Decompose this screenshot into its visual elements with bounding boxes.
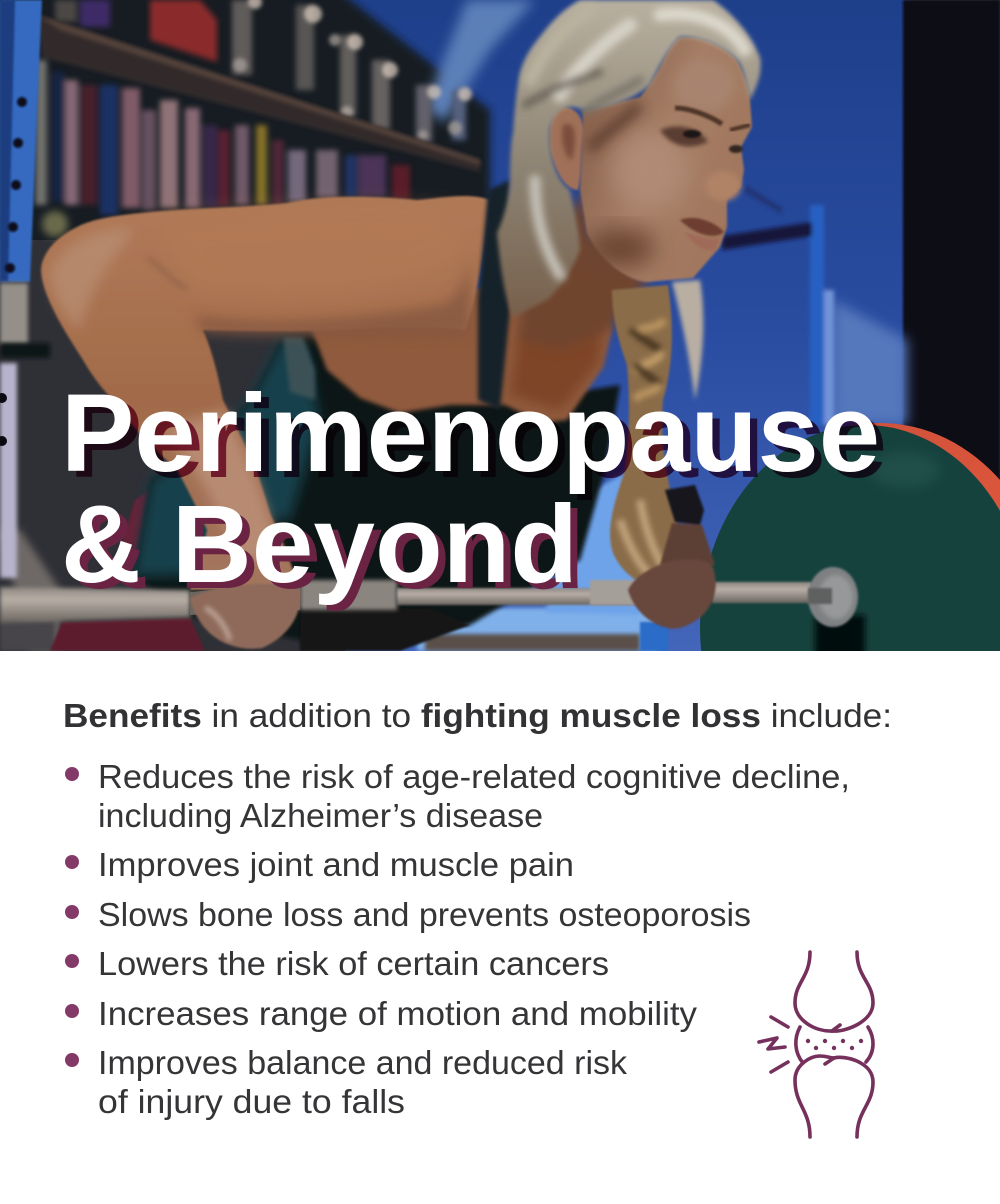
intro heading: Benefits in addition to fighting muscle loss include: (63, 698, 892, 735)
bullet: balance: Improves balance and reduced risk (98, 1045, 627, 1082)
bullet: balance: of injury due to falls (98, 1084, 405, 1121)
trophies and ribbons above the shelf (55, 0, 466, 143)
bullet: balance (65, 1045, 627, 1121)
bullet: cognitive decline: including Alzheimer’s disease (98, 798, 543, 835)
bullet: cognitive decline: Reduces the risk of age-related cognitive decline, (98, 759, 850, 796)
bullet: mobility: Increases range of motion and mobility (98, 996, 697, 1033)
bullet: bone loss: Slows bone loss and prevents osteoporosis (98, 897, 751, 934)
woman's watch and wrist (660, 485, 715, 565)
woman's chest and neck (310, 280, 612, 423)
title (61, 372, 880, 606)
title shadow, second line: & Beyond (69, 489, 585, 612)
woman's face (580, 37, 752, 282)
floor and light patches (417, 470, 668, 651)
title: Perimenopause (61, 372, 880, 495)
icon: painful knee joint (759, 952, 873, 1137)
rack on the wall at right (722, 185, 834, 425)
woman's hair (497, 0, 761, 400)
weight plate (700, 423, 1000, 651)
woman's ear (549, 107, 583, 190)
shelf board (37, 15, 480, 172)
bullet: cognitive decline (65, 759, 850, 835)
title: & Beyond (61, 483, 578, 606)
woman's shorts (50, 490, 205, 651)
woman's neck (520, 190, 650, 350)
benefits list (65, 759, 850, 1121)
woman's arm (41, 196, 490, 590)
woman's black tank top (133, 335, 620, 651)
tank top strap (478, 180, 510, 410)
hero photo: woman lifting a barbell (0, 0, 1000, 651)
gym shelf with trophies and medals (35, 0, 480, 237)
bullet: cancers: Lowers the risk of certain cancers (98, 946, 609, 983)
woman's hands on the barbell (190, 559, 716, 649)
blue rack upright (0, 0, 50, 578)
woman's braid (610, 285, 677, 586)
barbell (0, 567, 858, 627)
bullet: joint pain: Improves joint and muscle pain (98, 847, 574, 884)
title shadow, first line: Perimenopause (69, 378, 887, 501)
hanging medal ribbons (35, 60, 410, 215)
photo background: gym wall (0, 0, 1000, 651)
